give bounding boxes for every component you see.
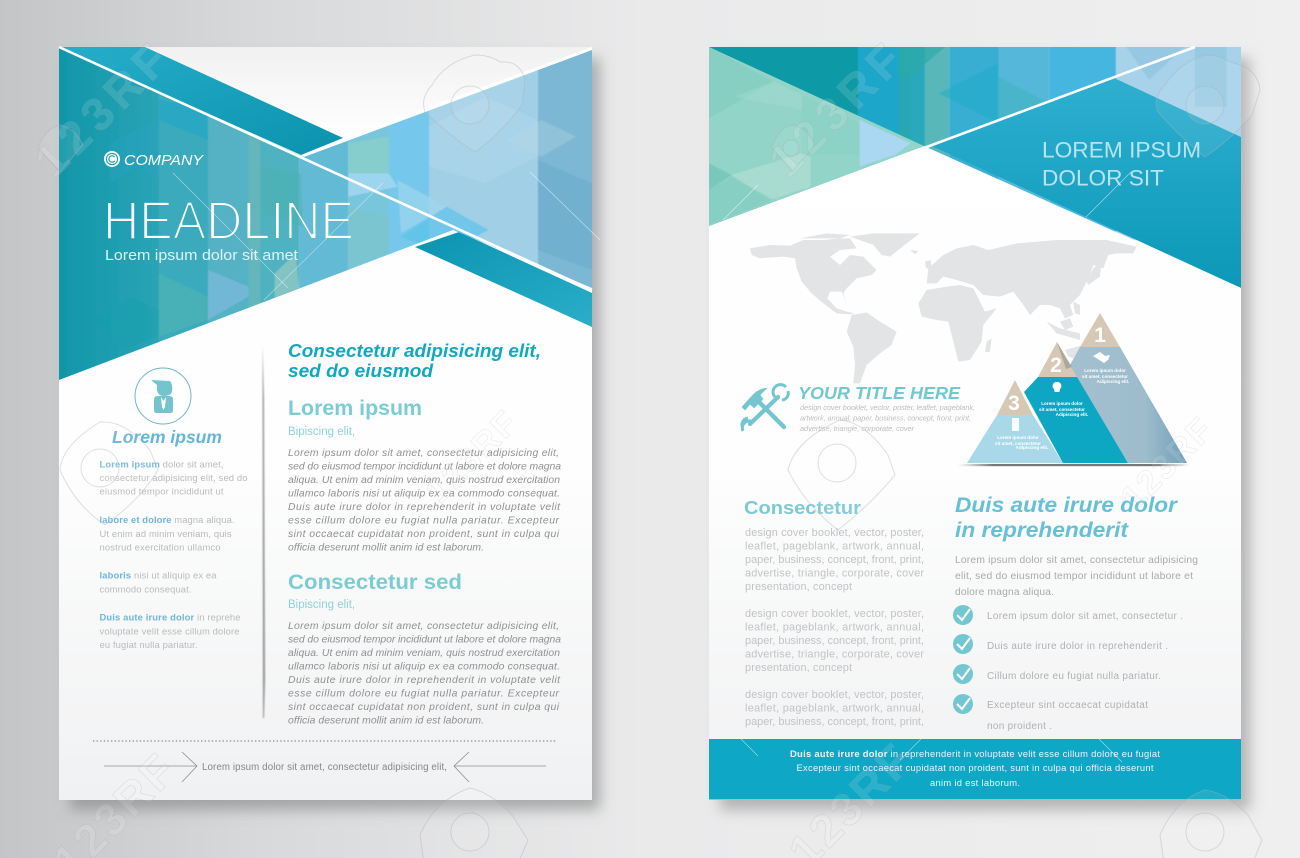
lower teal triangle	[932, 78, 1241, 288]
section body text: esse cillum dolore eu fugiat nulla pariatur. Excepteur	[288, 516, 560, 526]
lower teal band	[415, 232, 592, 327]
sidebar heading: Lorem ipsum	[112, 427, 222, 447]
sidebar text: consectetur adipisicing elit, sed do	[100, 472, 248, 483]
column text: advertise, triangle, corporate, cover	[745, 648, 924, 660]
sidebar text: Ut enim ad minim veniam, quis	[100, 528, 232, 539]
sidebar text: laboris nisi ut aliquip ex ea	[100, 570, 217, 580]
main heading: Consectetur adipisicing elit,	[288, 341, 541, 361]
upper teal band	[59, 47, 343, 155]
column text: paper, business, concept, front, print,	[745, 716, 924, 728]
section subheading: Bipiscing elit,	[288, 426, 355, 438]
footer text: Duis aute irure dolor in reprehenderit in voluptate velit esse cillum dolore eu fugiat	[790, 748, 1160, 759]
white crossing line	[59, 47, 592, 290]
right column heading: Duis aute irure dolor	[955, 493, 1179, 517]
check text 4: Excepteur sint occaecat cupidatat	[987, 700, 1148, 711]
sidebar text: nostrud exercitation ullamco	[100, 542, 220, 552]
header title: LOREM IPSUM	[1042, 138, 1201, 162]
section body text: aliqua. Ut enim ad minim veniam, quis nostrud exercitation	[288, 475, 560, 486]
section body text: aliqua. Ut enim ad minim veniam, quis nostrud exercitation	[288, 648, 560, 659]
right column paragraph: Lorem ipsum dolor sit amet, consectetur adipisicing	[955, 555, 1198, 566]
section subheading: Bipiscing elit,	[288, 599, 355, 611]
check text 4	[987, 700, 1148, 732]
main heading	[288, 341, 541, 381]
pyramid 2: Adipiscing elit.	[1056, 412, 1088, 417]
pyramid 3: Lorem ipsum dolor	[997, 435, 1039, 440]
sidebar text: voluptate velit esse cillum dolore	[100, 626, 240, 636]
footer text	[790, 748, 1160, 788]
pyramid 1: Adipiscing elit.	[1097, 379, 1129, 384]
pyramid 2	[1024, 342, 1128, 463]
main heading: sed do eiusmod	[288, 361, 434, 381]
sidebar text: eu fugiat nulla pariatur.	[100, 639, 198, 650]
pyramid 2: Lorem ipsum dolor	[1041, 401, 1083, 406]
section body text: ullamco laboris nisi ut aliquip ex ea commodo consequat.	[288, 488, 560, 500]
footer text: anim id est laborum.	[930, 777, 1020, 788]
title description	[800, 403, 975, 433]
section body text: Duis aute irure dolor in reprehenderit in voluptate velit	[288, 675, 561, 686]
footer note: Lorem ipsum dolor sit amet, consectetur adipisicing elit,	[202, 762, 447, 773]
world map	[750, 233, 1137, 383]
pyramid 3: 3	[1008, 392, 1020, 415]
column text: leaflet, pageblank, artwork, annual,	[745, 622, 924, 634]
triangle infographic	[958, 313, 1190, 466]
sidebar text	[100, 458, 248, 650]
checklist	[953, 605, 1183, 732]
sidebar text: commodo consequat.	[100, 584, 192, 594]
check text 4: non proident .	[987, 721, 1052, 732]
icon: hammer and wrench	[742, 385, 788, 431]
section heading: Consectetur sed	[288, 570, 462, 594]
right header artwork	[700, 40, 1256, 288]
section body text: sed do eiusmod tempor incididunt ut labore et dolore magna	[288, 634, 561, 646]
watermarks: 123RF	[758, 34, 912, 187]
crossing geometric panel	[50, 40, 608, 390]
pyramid 2: 2	[1050, 354, 1062, 377]
pyramid 3: Adipiscing elit.	[1016, 445, 1048, 450]
column text: design cover booklet, vector, poster,	[745, 527, 924, 539]
arrow: right pointing	[104, 752, 197, 782]
panel: right page	[700, 40, 1256, 810]
section heading: Lorem ipsum	[288, 396, 422, 420]
watermarks: 123RF	[419, 404, 525, 511]
right column paragraph	[955, 555, 1198, 598]
section body text: officia deserunt mollit anim id est laborum.	[288, 716, 484, 726]
section body text: ullamco laboris nisi ut aliquip ex ea commodo consequat.	[288, 662, 560, 672]
watermarks: 123RF	[1114, 411, 1220, 518]
check item 2	[953, 634, 973, 654]
pyramid 2: sit amet, consectetur	[1039, 407, 1085, 412]
right column paragraph: elit, sed do eiusmod tempor incididunt ut labore et	[955, 571, 1193, 582]
right column heading	[955, 493, 1179, 542]
sidebar text: Duis aute irure dolor in reprehe	[100, 612, 240, 622]
sidebar text: labore et dolore magna aliqua.	[100, 514, 234, 525]
sidebar text: Lorem ipsum dolor sit amet,	[100, 458, 224, 470]
section body text	[288, 621, 561, 726]
section body text: sint occaecat cupidatat non proident, sunt in culpa qui	[288, 529, 560, 540]
check item 4	[953, 694, 973, 714]
base shadow	[958, 464, 1190, 466]
column text: paper, business, concept, front, print,	[745, 635, 924, 647]
right column paragraph: dolore magna aliqua.	[955, 587, 1054, 598]
section body text: Lorem ipsum dolor sit amet, consectetur adipisicing elit,	[288, 448, 559, 459]
column text: presentation, concept	[745, 581, 852, 593]
column heading: Consectetur	[744, 497, 861, 518]
column text: advertise, triangle, corporate, cover	[745, 568, 924, 580]
column text: design cover booklet, vector, poster,	[745, 608, 924, 620]
column text: design cover booklet, vector, poster,	[745, 689, 924, 701]
header title: DOLOR SIT	[1042, 166, 1164, 190]
section body text: sint occaecat cupidatat non proident, sunt in culpa qui	[288, 702, 560, 713]
check item 3	[953, 664, 973, 684]
watermarks: 123RF	[24, 34, 178, 187]
title description: design cover booklet, vector, poster, leaflet, pageblank,	[800, 403, 975, 412]
pyramid 1: 1	[1094, 324, 1106, 347]
check item 1	[953, 605, 973, 625]
section body text: Lorem ipsum dolor sit amet, consectetur adipisicing elit,	[288, 621, 559, 632]
title description: artwork, annual, paper, business, concept, front, print,	[800, 414, 971, 422]
headline: HEADLINE	[103, 191, 354, 251]
sidebar divider	[262, 345, 265, 718]
section body text: officia deserunt mollit anim id est laborum.	[288, 542, 484, 554]
white diagonal line	[924, 47, 1195, 148]
check text 3: Cillum dolore eu fugiat nulla pariatur.	[987, 671, 1161, 682]
left header artwork	[50, 40, 608, 390]
company name: COMPANY	[124, 153, 204, 169]
section body text	[288, 448, 561, 554]
title description: advertise, triangle, corporate, cover	[800, 424, 915, 433]
pyramid 1: Lorem ipsum dolor	[1084, 368, 1126, 373]
arrow: left pointing	[454, 752, 546, 782]
footer text: Excepteur sint occaecat cupidatat non proident, sunt in culpa qui officia deserunt	[796, 762, 1154, 773]
check text 1: Lorem ipsum dolor sit amet, consectetur .	[987, 611, 1183, 622]
section body text: sed do eiusmod tempor incididunt ut labore et dolore magna	[288, 462, 561, 472]
header title	[1042, 138, 1201, 190]
sidebar text: eiusmod tempor incididunt ut	[100, 486, 224, 496]
pyramid 1: sit amet, consectetur	[1082, 374, 1128, 379]
subheadline: Lorem ipsum dolor sit amet	[105, 248, 298, 264]
mint triangle	[709, 47, 924, 226]
footer band	[709, 739, 1241, 800]
check text 2: Duis aute irure dolor in reprehenderit .	[987, 641, 1168, 652]
pyramid 3	[967, 380, 1063, 463]
column text	[745, 527, 924, 728]
column text: leaflet, pageblank, artwork, annual,	[745, 702, 924, 714]
column text: leaflet, pageblank, artwork, annual,	[745, 540, 924, 552]
pyramid 3: sit amet, consectetur	[995, 441, 1041, 446]
your title heading: YOUR TITLE HERE	[798, 383, 961, 403]
panel: left page	[50, 40, 608, 810]
icon: company logo	[104, 151, 120, 167]
right column heading: in reprehenderit	[955, 518, 1129, 542]
icon: person in circle	[135, 368, 191, 424]
column text: paper, business, concept, front, print,	[745, 554, 924, 566]
pyramid 1	[1070, 313, 1187, 463]
section body text: Duis aute irure dolor in reprehenderit in voluptate velit	[288, 502, 561, 513]
section body text: esse cillum dolore eu fugiat nulla pariatur. Excepteur	[288, 688, 560, 700]
column text: presentation, concept	[745, 662, 852, 674]
